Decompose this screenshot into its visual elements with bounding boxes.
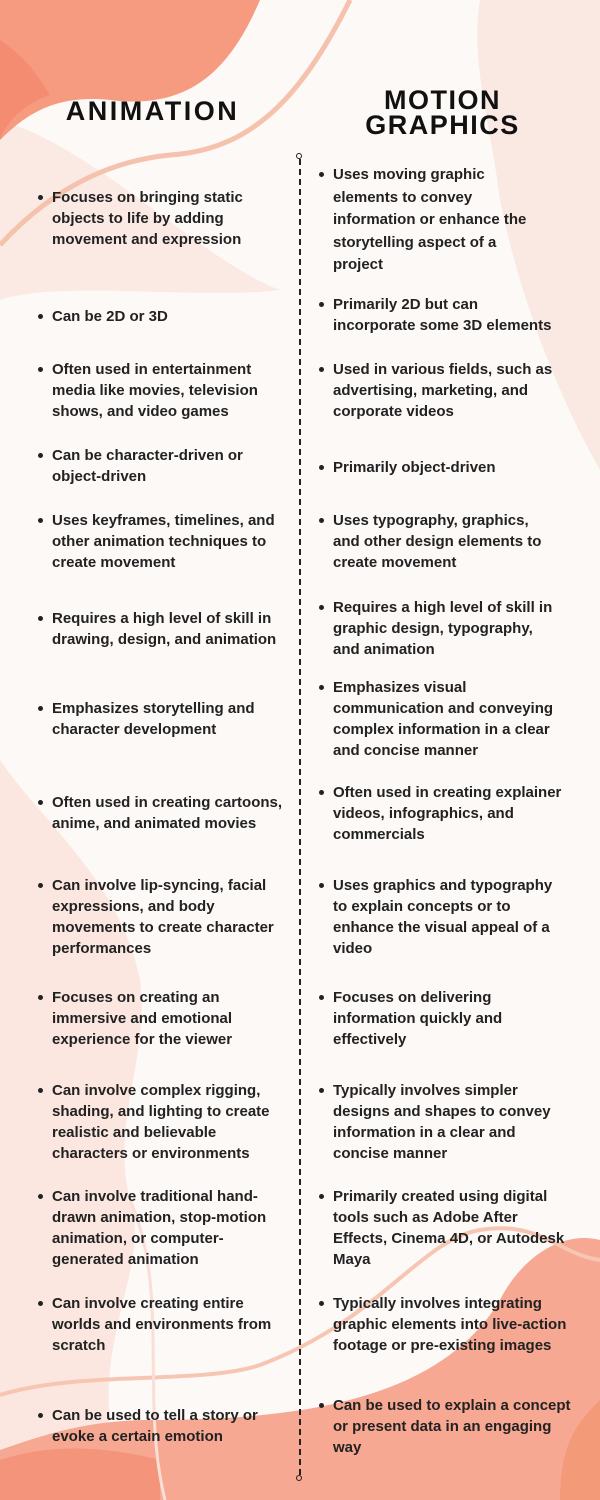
left column: Can be 2D or 3D <box>52 308 168 325</box>
right column: designs and shapes to convey <box>333 1103 551 1120</box>
left column: Uses keyframes, timelines, and <box>52 512 275 529</box>
right column: Typically involves simpler <box>333 1082 518 1099</box>
right column: Effects, Cinema 4D, or Autodesk <box>333 1230 564 1247</box>
left column: shading, and lighting to create <box>52 1103 270 1120</box>
right column: Primarily 2D but can <box>333 296 478 313</box>
right column: advertising, marketing, and <box>333 382 528 399</box>
right column: storytelling aspect of a <box>333 234 496 250</box>
right column: corporate videos <box>333 403 454 420</box>
right column: graphic design, typography, <box>333 620 533 637</box>
divider line <box>296 153 302 1481</box>
right column <box>319 166 571 1456</box>
left column: media like movies, television <box>52 382 258 399</box>
right column: enhance the visual appeal of a <box>333 919 550 936</box>
left column: expressions, and body <box>52 898 215 915</box>
right column: Typically involves integrating <box>333 1295 542 1312</box>
right column: footage or pre-existing images <box>333 1337 551 1354</box>
heading: motion graphics: GRAPHICS <box>365 110 520 140</box>
right column: or present data in an engaging <box>333 1418 551 1435</box>
left column: Focuses on creating an <box>52 989 220 1006</box>
right column: elements to convey <box>333 188 472 206</box>
left column: scratch <box>52 1337 105 1354</box>
right column: project <box>333 256 383 273</box>
left column: object-driven <box>52 468 146 485</box>
left column: drawing, design, and animation <box>52 631 276 648</box>
left column: performances <box>52 940 151 957</box>
right column: effectively <box>333 1031 406 1048</box>
left column: Can be character-driven or <box>52 447 243 464</box>
right column: and concise manner <box>333 742 478 759</box>
left column: immersive and emotional <box>52 1010 232 1027</box>
right column: communication and conveying <box>333 700 553 717</box>
right column: complex information in a clear <box>333 721 550 738</box>
left column: Requires a high level of skill in <box>52 610 271 627</box>
right column: Uses graphics and typography <box>333 877 552 894</box>
right column: information or enhance the <box>333 211 526 228</box>
right column: Maya <box>333 1251 371 1268</box>
left column: Can involve complex rigging, <box>52 1082 260 1099</box>
left column: Emphasizes storytelling and <box>52 700 255 717</box>
left column: Often used in entertainment <box>52 361 251 378</box>
right column: and other design elements to <box>333 533 541 550</box>
heading: motion graphics: MOTION <box>384 85 501 115</box>
left column: generated animation <box>52 1251 199 1268</box>
right column: and animation <box>333 641 435 658</box>
left column: objects to life by adding <box>52 210 224 227</box>
right column: information in a clear and <box>333 1124 516 1141</box>
right column: video <box>333 940 372 957</box>
left column: Can involve traditional hand- <box>52 1188 258 1205</box>
left column: experience for the viewer <box>52 1031 232 1048</box>
right column: Requires a high level of skill in <box>333 599 552 616</box>
left column: realistic and believable <box>52 1124 216 1141</box>
left column: worlds and environments from <box>52 1316 271 1333</box>
right column: Emphasizes visual <box>333 679 466 696</box>
right column: Uses typography, graphics, <box>333 512 529 529</box>
right column: concise manner <box>333 1145 447 1162</box>
left column: characters or environments <box>52 1145 250 1162</box>
left column: Focuses on bringing static <box>52 189 243 206</box>
right column: Primarily created using digital <box>333 1188 547 1205</box>
right column: Primarily object-driven <box>333 459 496 476</box>
right column: way <box>333 1439 361 1456</box>
right column: Can be used to explain a concept <box>333 1397 571 1414</box>
right column: Focuses on delivering <box>333 989 491 1006</box>
left column <box>38 189 282 1445</box>
left column: other animation techniques to <box>52 533 266 550</box>
right column: Uses moving graphic <box>333 166 485 183</box>
right column: create movement <box>333 554 456 571</box>
right column: Often used in creating explainer <box>333 784 561 801</box>
right column: information quickly and <box>333 1010 502 1027</box>
left column: Can involve creating entire <box>52 1295 244 1312</box>
left column: evoke a certain emotion <box>52 1428 223 1445</box>
left column: Often used in creating cartoons, <box>52 794 282 811</box>
left column: anime, and animated movies <box>52 815 256 832</box>
right column: tools such as Adobe After <box>333 1209 518 1226</box>
left column: drawn animation, stop-motion <box>52 1209 266 1226</box>
right column: Used in various fields, such as <box>333 361 552 378</box>
left column: movements to create character <box>52 919 274 936</box>
right column: videos, infographics, and <box>333 805 514 822</box>
left column: create movement <box>52 554 175 571</box>
heading: motion graphics <box>365 85 520 140</box>
left column: shows, and video games <box>52 403 229 420</box>
right column: commercials <box>333 826 425 843</box>
left column: Can be used to tell a story or <box>52 1407 258 1424</box>
right column: graphic elements into live-action <box>333 1316 566 1333</box>
heading: animation: ANIMATION <box>66 96 239 126</box>
left column: character development <box>52 721 216 738</box>
left column: movement and expression <box>52 231 241 248</box>
left column: animation, or computer- <box>52 1230 224 1247</box>
right column: incorporate some 3D elements <box>333 317 551 334</box>
right column: to explain concepts or to <box>333 898 511 915</box>
left column: Can involve lip-syncing, facial <box>52 877 266 894</box>
